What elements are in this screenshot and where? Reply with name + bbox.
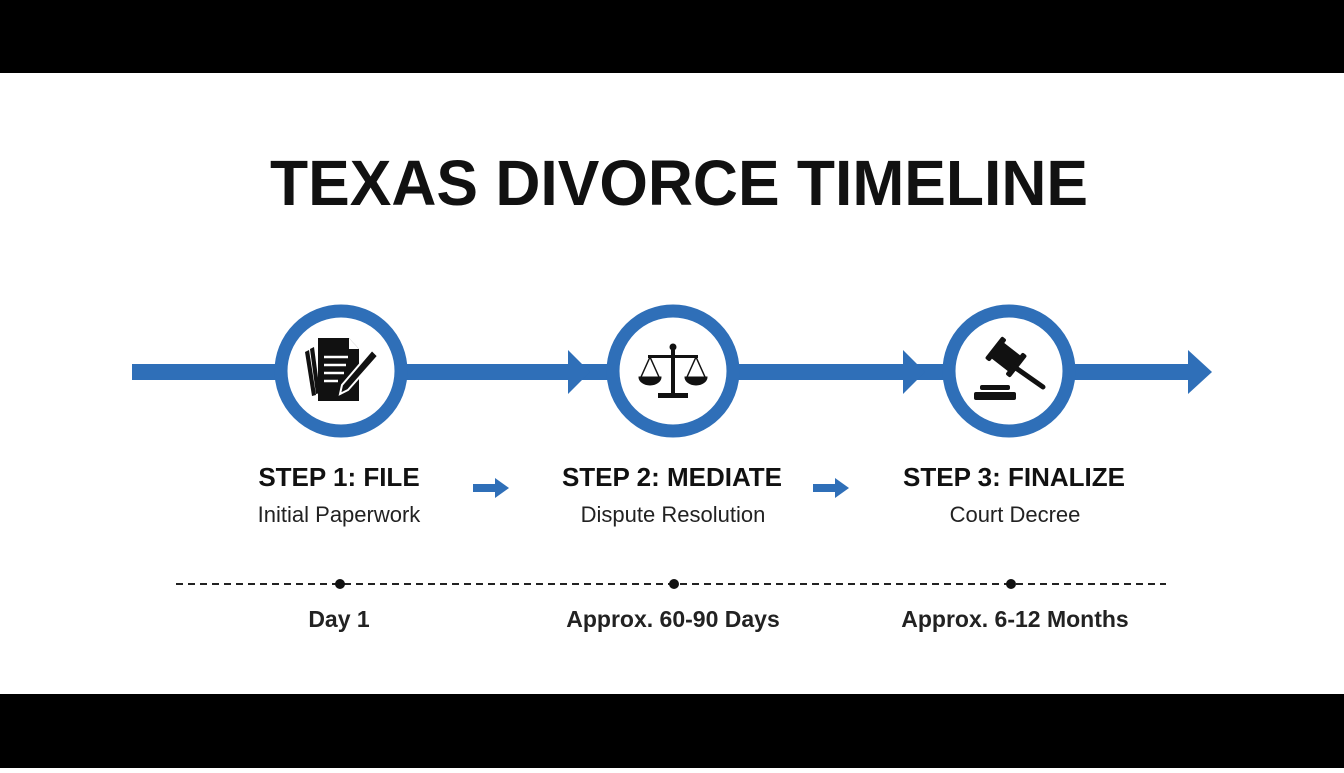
timeline arrow (132, 350, 1212, 394)
step 3 node: gavel icon (949, 311, 1069, 431)
step 1 label: STEP 1: FILE (258, 462, 420, 492)
arrow small 2 (813, 478, 849, 498)
step 1 node: file icon (281, 311, 401, 431)
step 2 label (562, 462, 782, 527)
dashed time axis (176, 579, 1166, 589)
step 1 label: Initial Paperwork (258, 502, 421, 527)
time labels: Approx. 6-12 Months (901, 606, 1129, 632)
time labels: Day 1 (308, 606, 370, 632)
time labels: Approx. 60-90 Days (566, 606, 780, 632)
time labels (308, 606, 1129, 632)
step 3 label (903, 462, 1125, 527)
step 2 label: STEP 2: MEDIATE (562, 462, 782, 492)
step 3 label: STEP 3: FINALIZE (903, 462, 1125, 492)
title: TEXAS DIVORCE TIMELINE (270, 147, 1088, 219)
arrow small 1 (473, 478, 509, 498)
step 1 label (258, 462, 421, 527)
step 3 label: Court Decree (950, 502, 1080, 527)
step 2 node: scales icon (613, 311, 733, 431)
step 2 label: Dispute Resolution (581, 502, 765, 527)
